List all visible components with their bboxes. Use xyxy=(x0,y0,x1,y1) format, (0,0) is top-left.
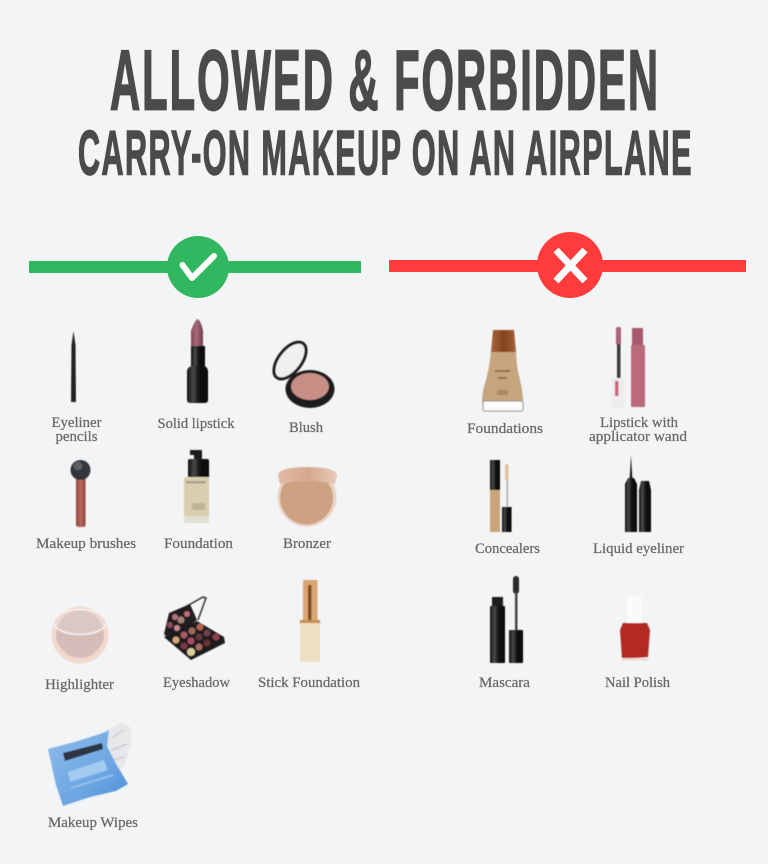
title xyxy=(78,34,693,188)
item: eyeshadow xyxy=(163,597,230,691)
item: foundations: Foundations xyxy=(467,421,543,437)
item: bronzer: Bronzer xyxy=(283,536,331,552)
item: blush: Blush xyxy=(289,420,323,436)
item: solid lipstick xyxy=(158,319,235,432)
item: nail polish xyxy=(605,596,670,691)
item: mascara xyxy=(479,576,530,691)
item: makeup wipes xyxy=(48,723,138,831)
item: lipstick with applicator wand: applicator wand xyxy=(589,429,688,445)
item: bronzer xyxy=(278,467,337,552)
item: lipstick with applicator wand xyxy=(589,327,688,445)
item: stick foundation: Stick Foundation xyxy=(258,675,360,691)
item: stick foundation xyxy=(258,580,360,691)
item: blush xyxy=(268,336,334,436)
item: lipstick with applicator wand: Lipstick with xyxy=(600,415,678,431)
item: foundation: Foundation xyxy=(164,536,233,552)
item: highlighter: Highlighter xyxy=(45,677,114,693)
item: eyeliner pencils: Eyeliner xyxy=(52,415,102,431)
item: eyeliner pencils xyxy=(52,331,102,445)
item: liquid eyeliner: Liquid eyeliner xyxy=(593,541,684,557)
item: concealers: Concealers xyxy=(475,541,540,557)
item: liquid eyeliner xyxy=(593,455,684,557)
item: eyeshadow: Eyeshadow xyxy=(163,675,230,691)
item: makeup brushes: Makeup brushes xyxy=(36,536,136,552)
item: makeup wipes: Makeup Wipes xyxy=(48,815,138,831)
forbidden header with cross icon xyxy=(389,232,746,298)
allowed header with check icon xyxy=(29,236,361,298)
item: foundation xyxy=(164,450,233,552)
item: nail polish: Nail Polish xyxy=(605,675,670,691)
item: solid lipstick: Solid lipstick xyxy=(158,416,235,432)
item: makeup brushes xyxy=(36,460,136,552)
item: highlighter xyxy=(45,606,114,693)
item: mascara: Mascara xyxy=(479,675,530,691)
item: concealers xyxy=(475,460,540,557)
item: foundations xyxy=(467,330,543,437)
item: eyeliner pencils: pencils xyxy=(56,429,98,445)
